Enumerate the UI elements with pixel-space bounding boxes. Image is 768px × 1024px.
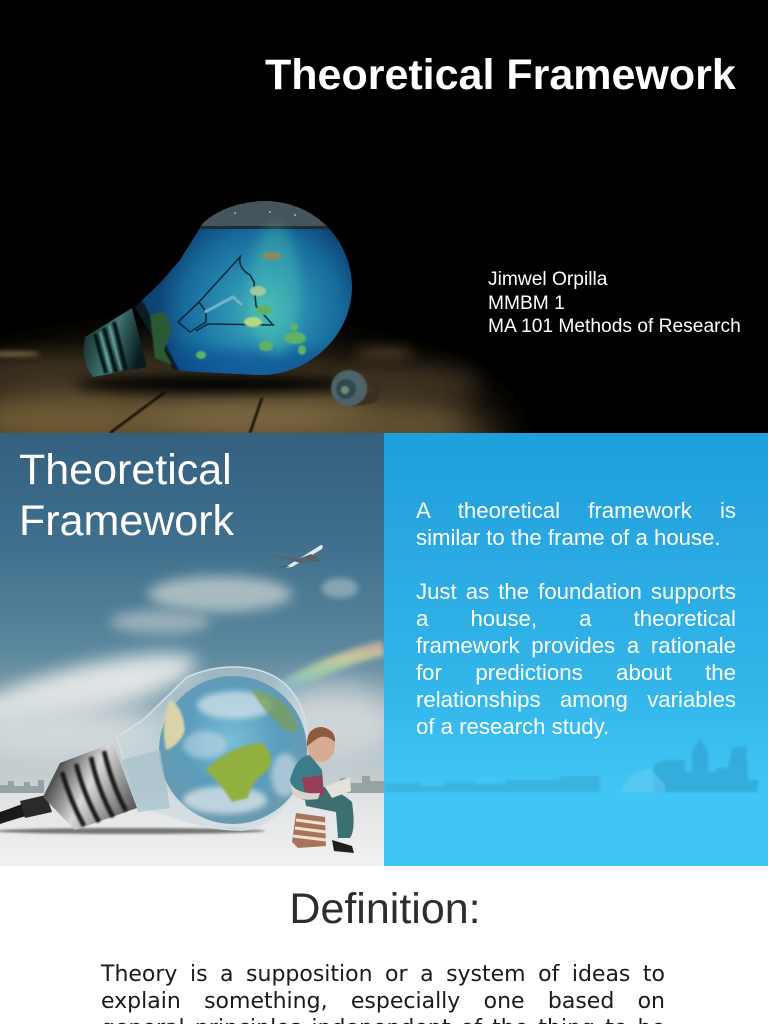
explanation text: a house, a theoretical <box>416 606 736 630</box>
panel: blue explanation <box>384 433 768 866</box>
panel: sky image with bulb <box>0 433 384 866</box>
explanation text: framework provides a rationale <box>416 632 736 658</box>
explanation text: for predictions about the <box>416 660 736 684</box>
bulb glass and water <box>135 201 352 375</box>
title: Theoretical Framework <box>265 51 736 99</box>
definition text <box>100 962 665 1024</box>
bulb glass <box>117 667 307 830</box>
airplane <box>268 545 323 568</box>
panel: definition <box>0 866 768 1024</box>
clouds <box>0 576 405 765</box>
boy reading on books <box>290 727 354 853</box>
author details: MA 101 Methods of Research <box>488 316 741 337</box>
author details: MMBM 1 <box>488 292 565 314</box>
fish <box>196 252 306 359</box>
heading <box>19 446 234 545</box>
definition text: explain something, especially one based on <box>101 989 665 1014</box>
explanation text: relationships among variables <box>416 686 736 712</box>
aquarium plant <box>150 312 172 365</box>
panel: title slide <box>0 0 768 433</box>
heading: Framework <box>19 497 234 545</box>
definition heading: Definition: <box>289 885 481 933</box>
snail <box>331 370 385 406</box>
bulb neck interior <box>122 750 170 812</box>
bulb filament <box>178 257 273 332</box>
illustration: light bulb aquarium on wooden floor <box>0 201 519 433</box>
horizon ground <box>0 793 384 866</box>
wood floor <box>0 349 500 540</box>
author details <box>488 269 741 337</box>
skyline <box>0 776 384 793</box>
earth globe <box>159 676 307 824</box>
ground shadow <box>0 828 265 834</box>
explanation text: Just as the foundation supports <box>416 578 736 604</box>
explanation text: of a research study. <box>416 714 609 738</box>
explanation text: similar to the frame of a house. <box>416 524 721 550</box>
explanation text: A theoretical framework is <box>416 498 736 522</box>
definition text: Theory is a supposition or a system of ideas to <box>101 962 665 986</box>
rainbow <box>278 648 384 692</box>
heading: Theoretical <box>19 446 232 494</box>
illustration: earth light bulb, airplane, boy reading <box>0 545 384 866</box>
bulb screw socket <box>84 308 147 377</box>
bulb screw socket and cable <box>0 743 137 830</box>
author details: Jimwel Orpilla <box>488 269 607 290</box>
explanation text <box>416 498 736 738</box>
blue skyline backdrop <box>384 739 758 792</box>
